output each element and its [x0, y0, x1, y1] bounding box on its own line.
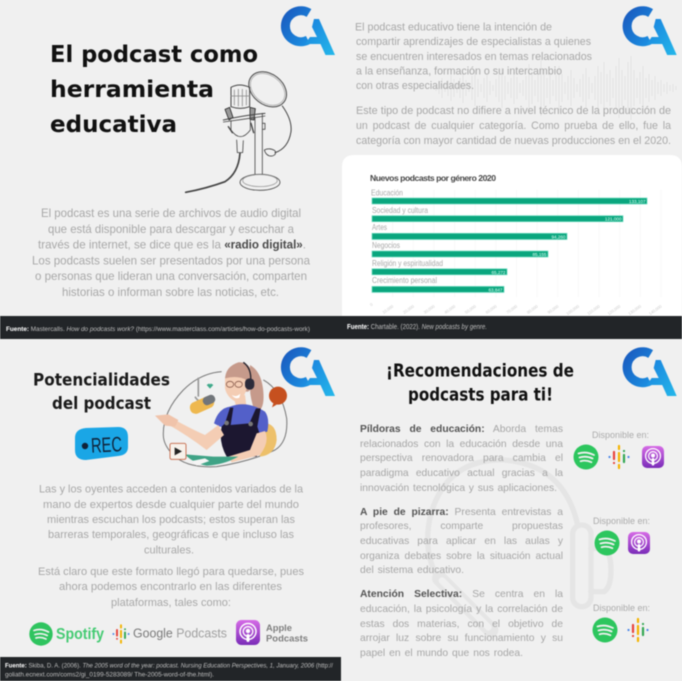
bar chart: nuevos podcasts por género: 70,000	[505, 303, 519, 315]
bar chart: nuevos podcasts por género: Religión y espiritualidad	[372, 259, 443, 268]
text block: contenidos variados: barreras temporales, geográficas e que incluso las	[48, 529, 294, 541]
text block: definition of podcast: que está disponible para descargar y escuchar a	[48, 223, 295, 236]
availability: Atención Selectiva	[592, 603, 650, 642]
recommendation: Atención Selectiva: Atención Selectiva: Se centra en la	[360, 589, 563, 600]
logo: GA	[627, 11, 677, 55]
text block: contenidos variados	[39, 484, 304, 556]
recommendation: Píldoras de educación: perspectiva renovadora para cambia el	[360, 453, 563, 464]
text block: plataformas: ahora podemos encontrarlo en las diferentes	[59, 581, 282, 593]
badge: REC: REC	[90, 433, 123, 458]
text block: contenidos variados: culturales.	[144, 544, 194, 556]
decoration: audio waveform	[436, 56, 676, 120]
text block: contenidos variados: mientras escuchan los podcasts; estos superan las	[47, 514, 295, 526]
recommendation: Píldoras de educación	[360, 424, 564, 494]
availability: Atención Selectiva: Disponible en:	[593, 603, 650, 613]
title: recomendaciones de podcasts para ti: ¡Recomendaciones de	[386, 362, 574, 382]
recommendation: Atención Selectiva: papel en el mundo que nos rodea.	[360, 648, 523, 659]
bar chart: nuevos podcasts por género: 120,000	[607, 303, 622, 316]
logo: Google Podcasts: Google Podcasts	[133, 626, 227, 641]
logo: GA	[285, 11, 335, 55]
bar chart: nuevos podcasts por género: 90,000	[546, 303, 560, 315]
bar chart: nuevos podcasts por género: 133,107	[629, 199, 646, 204]
badge: REC	[75, 427, 128, 460]
bar chart: nuevos podcasts por género: 85,155	[532, 252, 547, 257]
text block: categoría con mayor producción: Este tipo de podcast no difiere a nivel técnico de la producción de	[356, 105, 671, 117]
logo: Google Podcasts	[113, 625, 227, 643]
bar chart: nuevos podcasts por género: 30,000	[423, 303, 436, 315]
footer: source mastercalls: Fuente: Mastercalls. How do podcasts work? (https://www.masterclass.com/articles/how-do-podcasts-work)	[6, 326, 310, 333]
text block: definition of podcast: historias o informan sobre las noticias, etc.	[62, 286, 279, 299]
footer: source chartable	[341, 316, 682, 339]
text block: categoría con mayor producción	[356, 105, 672, 147]
bar chart: nuevos podcasts por género: 110,000	[586, 303, 601, 316]
bar chart: nuevos podcasts por género: 94,260	[551, 234, 566, 239]
recommendation: A pie de pizarra: educativas para aplicar en las aulas y	[360, 536, 563, 547]
bar chart: nuevos podcasts por género: 65,272	[491, 270, 506, 275]
logo: GA	[627, 352, 677, 396]
bar chart: nuevos podcasts por género: 50,000	[464, 303, 477, 315]
text block: podcast educativo intro: con otras especialidades.	[356, 80, 474, 92]
text block: plataformas	[38, 566, 304, 609]
bar chart: nuevos podcasts por género: 140,000	[648, 303, 663, 316]
bar chart: nuevos podcasts por género: 60,000	[485, 303, 498, 315]
icon: studio microphone with pop filter	[186, 65, 293, 192]
bar chart: nuevos podcasts por género: Educación	[371, 189, 403, 198]
logo: Spotify: Spotify	[56, 626, 104, 643]
text block: contenidos variados: Las y los oyentes acceden a contenidos variados de la	[39, 484, 304, 496]
recommendation: A pie de pizarra: profesores, comparte propuestas	[360, 521, 563, 532]
title: recomendaciones de podcasts para ti: podcasts para ti!	[408, 386, 553, 406]
recommendation: A pie de pizarra	[360, 506, 564, 576]
bar chart: nuevos podcasts por género: Sociedad y cultura	[372, 206, 428, 215]
availability: A pie de pizarra	[593, 516, 650, 556]
bar chart: nuevos podcasts por género: 130,000	[627, 303, 643, 316]
text block: contenidos variados: mano de expertos desde cualquier parte del mundo	[43, 499, 299, 511]
bar chart: nuevos podcasts por género: 80,000	[526, 303, 539, 315]
recommendation: Píldoras de educación: paradigma educativo actual gracias a la	[360, 468, 563, 479]
recommendation: Píldoras de educación: relacionados con la educación desde una	[360, 439, 563, 450]
text block: podcast educativo intro: compartir aprendizajes de especialistas a quienes	[356, 36, 591, 48]
logo: Apple Podcasts	[236, 620, 308, 645]
text block: podcast recommendations	[360, 424, 564, 659]
logo: GA	[285, 352, 335, 396]
title: el podcast como herramienta educativa: herramienta	[50, 75, 214, 103]
recommendation: Atención Selectiva	[360, 588, 564, 659]
availability: Píldoras de educación	[574, 430, 664, 470]
recommendation: A pie de pizarra: A pie de pizarra: Presenta entrevistas a	[360, 507, 563, 518]
bar chart: nuevos podcasts por género	[369, 189, 663, 316]
bar chart: nuevos podcasts por género: Crecimiento personal	[372, 276, 437, 285]
text block: podcast educativo intro: se encuentren interesados en temas relacionados	[356, 51, 592, 63]
logo: Apple Podcasts: Apple	[266, 623, 292, 633]
bar chart: nuevos podcasts por género: 0	[369, 301, 374, 307]
text block: plataformas: Está claro que este formato llegó para quedarse, pues	[38, 566, 304, 578]
panel: potencialidades del podcast	[0, 340, 341, 681]
recommendation: Píldoras de educación: Píldoras de educación: Aborda temas	[360, 424, 563, 435]
bar chart: nuevos podcasts por género: 10,000	[381, 303, 395, 315]
recommendation: A pie de pizarra: del sistema educativo.	[360, 565, 464, 576]
logo: Apple Podcasts: Podcasts	[266, 634, 308, 644]
text block: podcast educativo intro: El podcast educativo tiene la intención de	[355, 22, 552, 34]
bar chart: nuevos podcasts por género: Negocios	[372, 241, 400, 250]
footer: source mastercalls	[0, 316, 341, 339]
panel: podcast educativo y gráfico	[341, 0, 682, 340]
title: potencialidades del podcast	[33, 371, 170, 413]
bar chart: nuevos podcasts por género: 40,000	[443, 303, 457, 315]
text block: definition of podcast: o personas que lideran una conversación, comparten	[35, 270, 307, 283]
text block: podcast educativo intro: a la enseñanza, formación o su intercambio	[356, 66, 562, 78]
text block: definition of podcast: El podcast es una serie de archivos de audio digital	[41, 207, 301, 220]
logo: Spotify	[29, 622, 104, 646]
text block: plataformas: plataformas, tales como:	[111, 597, 231, 609]
text block: definition of podcast: Los podcasts suelen ser presentados por una persona	[32, 254, 311, 268]
availability: A pie de pizarra: Disponible en:	[593, 516, 650, 526]
footer: source Skiba	[0, 657, 341, 681]
panel: chart card	[342, 155, 682, 316]
text block: definition of podcast	[32, 207, 311, 299]
chart title: Nuevos podcasts por género 2020	[370, 173, 496, 183]
bar chart: nuevos podcasts por género: Artes	[372, 223, 387, 232]
panel: recomendaciones de podcasts	[341, 340, 682, 681]
text block: categoría con mayor producción: categoría con mayor cantidad de nuevas producciones en el 2020.	[356, 135, 671, 147]
title: potencialidades del podcast: Potencialidades	[33, 371, 170, 390]
footer: source Skiba: Fuente: Skiba, D. A. (2006). The 2005 word of the year: podcast. Nursing Education Perspectives, 1, January, 2006 (http://	[5, 662, 333, 670]
recommendation: Atención Selectiva: arrojar luz sobre su funcionamiento y su	[360, 633, 563, 644]
text block: podcast educativo intro	[355, 22, 592, 92]
footer: source Skiba: goliath.ecnext.com/coms2/gi_0199-5283089/ The-2005-word-of-the.html).	[5, 672, 214, 678]
title: el podcast como herramienta educativa: El podcast como	[50, 40, 258, 68]
recommendation: Píldoras de educación: innovación tecnológica y sus aplicaciones.	[360, 483, 557, 494]
availability: Píldoras de educación: Disponible en:	[592, 430, 649, 440]
recommendation: Atención Selectiva: educación, la psicología y la correlación de	[360, 604, 563, 615]
title: recomendaciones de podcasts para ti	[386, 362, 574, 406]
title: el podcast como herramienta educativa: educativa	[50, 110, 177, 138]
bar chart: nuevos podcasts por género: 121,000	[605, 217, 622, 222]
illustration: woman with headphones and microphone	[155, 362, 287, 467]
title: el podcast como herramienta educativa	[50, 40, 258, 138]
decoration: headphones watermark	[428, 460, 611, 630]
text block: definition of podcast: través de internet, se dice que es la «radio digital».	[38, 238, 306, 252]
bar chart: nuevos podcasts por género: 100,000	[565, 303, 581, 316]
recommendation: Atención Selectiva: estas dos materias, con el objetivo de	[360, 619, 563, 630]
footer: source chartable: Fuente: Chartable. (2022). New podcasts by genre.	[347, 324, 487, 331]
text block: categoría con mayor producción: un podcast de cualquier categoría. Como prueba de ello, fue la	[356, 120, 672, 132]
title: potencialidades del podcast: del podcast	[52, 394, 151, 413]
bar chart: nuevos podcasts por género: 63,847	[488, 287, 503, 292]
recommendation: A pie de pizarra: organiza debates sobre la situación actual	[360, 551, 563, 562]
panel: el podcast como herramienta educativa	[0, 0, 341, 340]
bar chart: nuevos podcasts por género: 20,000	[402, 303, 416, 315]
